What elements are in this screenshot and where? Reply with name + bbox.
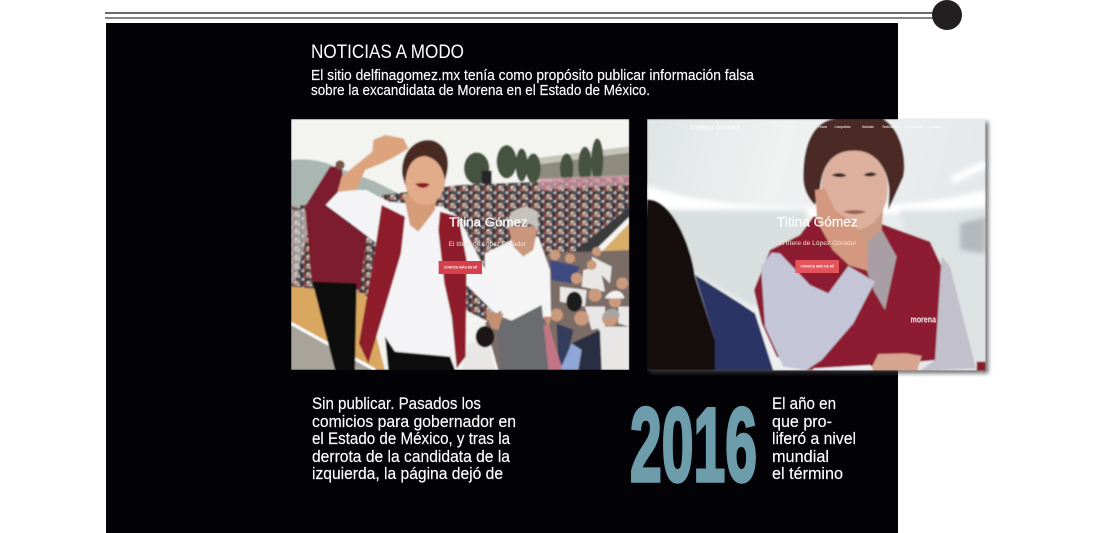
intro text: El sitio delfinagomez.mx tenía como propósito publicar información falsa bbox=[311, 67, 755, 84]
site navigation: Testimonios bbox=[882, 125, 900, 129]
title: NOTICIAS A MODO bbox=[311, 42, 464, 63]
right body text: el término bbox=[772, 464, 843, 483]
man in maroon jacket bbox=[305, 167, 367, 290]
right body text: que pro- bbox=[772, 412, 832, 431]
inner shirt bbox=[846, 229, 898, 310]
sleeves bbox=[761, 253, 875, 370]
left body text: Sin publicar. Pasados los bbox=[312, 394, 481, 413]
double rule header line bbox=[105, 12, 935, 19]
left body text: izquierda, la página dejó de bbox=[312, 464, 503, 483]
left body text: derrota de la candidata de la bbox=[312, 447, 510, 466]
site name: Delfina Gómez bbox=[691, 124, 740, 131]
red button bbox=[795, 260, 839, 273]
head and hair bbox=[858, 209, 884, 243]
photo: portrait screenshot with shadow bbox=[647, 119, 988, 373]
right body text: El año en bbox=[772, 394, 836, 413]
red button: CONOCE MÁS DE MÍ bbox=[800, 264, 834, 269]
right body text: liferó a nivel bbox=[772, 429, 856, 448]
red button: CONOCE MÁS DE MÍ bbox=[444, 265, 477, 270]
right body text bbox=[772, 394, 856, 483]
big number 2016: 2016 bbox=[630, 387, 757, 504]
site title overlay: Titina Gómez bbox=[449, 215, 528, 230]
left body text bbox=[312, 394, 516, 483]
intro text bbox=[311, 67, 755, 99]
photo: rally screenshot bbox=[291, 119, 629, 370]
left body text: el Estado de México, y tras la bbox=[312, 429, 510, 448]
site navigation: Campañas bbox=[834, 125, 851, 129]
site navigation: Home bbox=[818, 125, 827, 129]
hand bbox=[815, 188, 868, 271]
right body text: mundial bbox=[772, 447, 829, 466]
vest logo: morena bbox=[911, 315, 937, 325]
black panel bbox=[106, 23, 898, 533]
site subtitle overlay: El títere de López Obrador bbox=[778, 240, 856, 247]
site navigation: Contacto bbox=[928, 125, 941, 129]
woman in white shirt and red vest bbox=[324, 189, 502, 314]
lower right crowd bbox=[485, 250, 629, 370]
vest bbox=[754, 217, 942, 370]
intro text: sobre la excandidata de Morena en el Estado de México. bbox=[311, 82, 650, 99]
red button bbox=[439, 261, 482, 274]
man in white shirt bbox=[485, 237, 551, 321]
site navigation: Noticias bbox=[862, 125, 874, 129]
site title overlay: Titina Gómez bbox=[777, 214, 858, 230]
site navigation: Conóceme bbox=[905, 125, 922, 129]
header circle bbox=[932, 0, 962, 30]
site navigation bbox=[818, 126, 941, 129]
site subtitle overlay: El títere de López Obrador bbox=[449, 241, 526, 248]
left body text: comicios para gobernador en bbox=[312, 412, 516, 431]
